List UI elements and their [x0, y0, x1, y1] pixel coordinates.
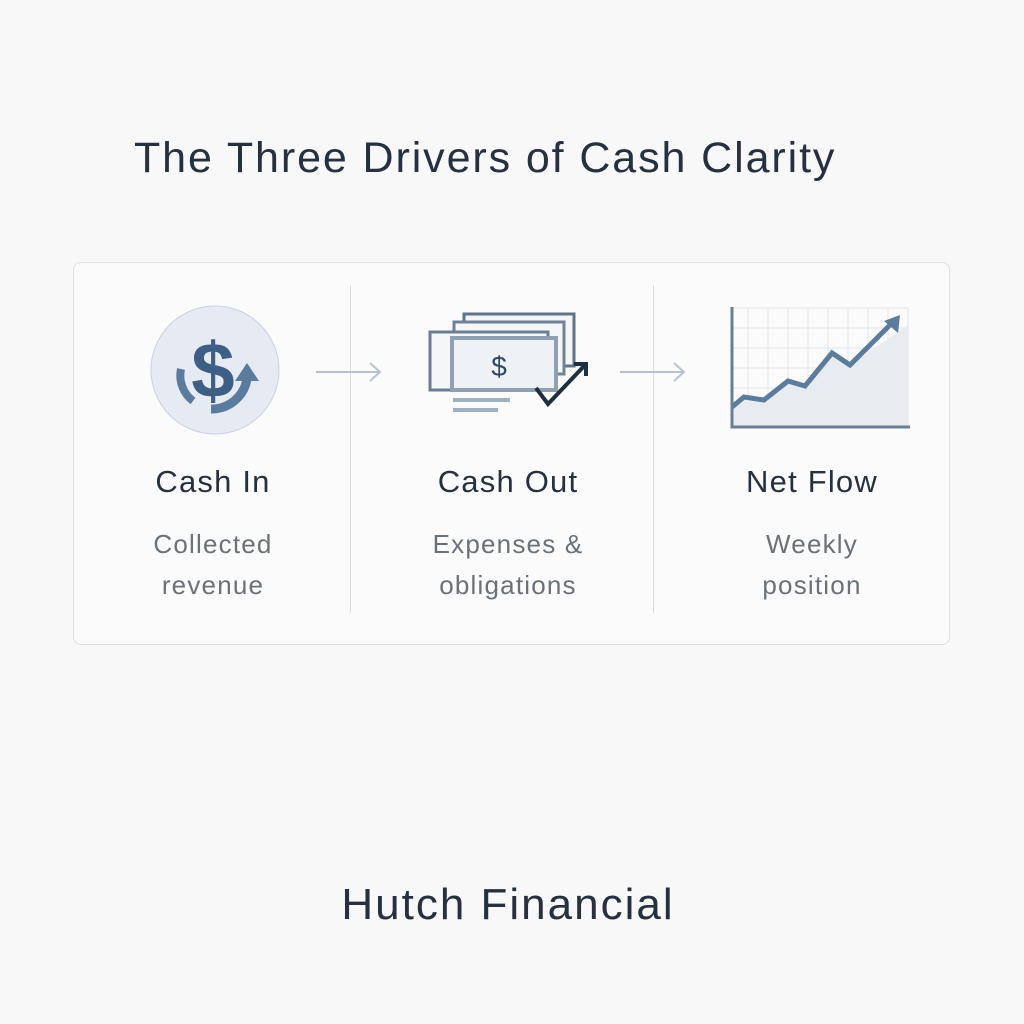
- text: cash out sub: obligations: [439, 570, 577, 600]
- text: net flow sub: [762, 529, 862, 600]
- icon: net flow chart: [730, 307, 910, 428]
- label: cash in: Cash In: [155, 464, 271, 499]
- icon: cash out bills: [428, 312, 588, 412]
- label: net flow: Net Flow: [746, 464, 878, 499]
- label: cash out: Cash Out: [438, 464, 578, 499]
- arrow 2: [620, 362, 686, 382]
- text: net flow sub: position: [762, 570, 862, 600]
- text: cash in sub: Collected: [153, 529, 273, 559]
- icon: cash in coin: [150, 306, 280, 434]
- text: cash out sub: [433, 529, 583, 600]
- text: cash in sub: revenue: [162, 570, 264, 600]
- text: cash in sub: [153, 529, 273, 600]
- icon: cash in coin: $: [191, 326, 235, 414]
- arrow 1: [316, 362, 382, 382]
- footer brand: Hutch Financial: [341, 880, 675, 929]
- icon: cash out bills: $: [491, 351, 507, 382]
- text: cash out sub: Expenses &: [433, 529, 583, 559]
- text: net flow sub: Weekly: [766, 529, 858, 559]
- title: The Three Drivers of Cash Clarity: [134, 134, 836, 182]
- panel: drivers card: [73, 262, 950, 645]
